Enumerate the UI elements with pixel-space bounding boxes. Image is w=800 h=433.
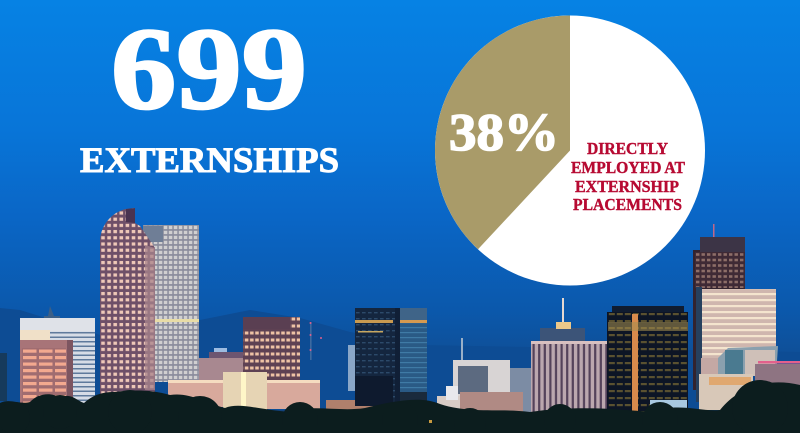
label: 38%: 38% [449,104,559,162]
building: white and grey office [437,338,531,426]
skyline: centre cluster [326,298,688,426]
heading: externships: EXTERNSHIPS [80,140,339,180]
building: dark tower with orange stripe [607,306,688,414]
building: far-left edge block [0,353,7,401]
building: grey-white tower [143,225,199,382]
label: directly employed at externship placements: EMPLOYED AT [571,158,685,177]
building: striped brown block [243,317,300,382]
label: directly employed at externship placements: PLACEMENTS [573,195,682,214]
label: directly employed at externship placements: DIRECTLY [587,139,668,158]
label: directly employed at externship placements: EXTERNSHIP [575,177,679,196]
small lit window through trees [429,420,432,423]
pie chart [435,16,705,286]
radio mast lights [310,322,322,360]
pie slice: 38 percent [435,16,570,249]
building: slim pale tower [348,345,355,391]
building: low cream podium [699,374,753,410]
building: dark glass tower [355,308,427,406]
skyline: left cluster [0,208,320,412]
building: cream striped tower [696,287,776,402]
treeline [0,380,800,433]
building: low cream hotel wings [168,380,320,409]
label: directly employed at externship placements [571,139,685,214]
building: dark brown tall tower [693,224,745,390]
building: back mid-rise with sign [199,348,243,382]
building: low cream block [326,400,376,412]
building: striped mauve tower with spire [531,298,612,412]
building: lit white hotel block [223,372,267,410]
building: curved glass pavilion [718,346,778,376]
building: mauve low block at far right [755,361,800,386]
pie slice: remaining share [435,16,705,286]
building: pink office block [20,340,73,412]
heading: 699: 699 [111,5,307,134]
building: white tower with antenna [20,306,95,408]
building: tall rounded-top tower [100,208,155,394]
mountains on the horizon [0,308,800,410]
skyline: right cluster [693,224,800,410]
